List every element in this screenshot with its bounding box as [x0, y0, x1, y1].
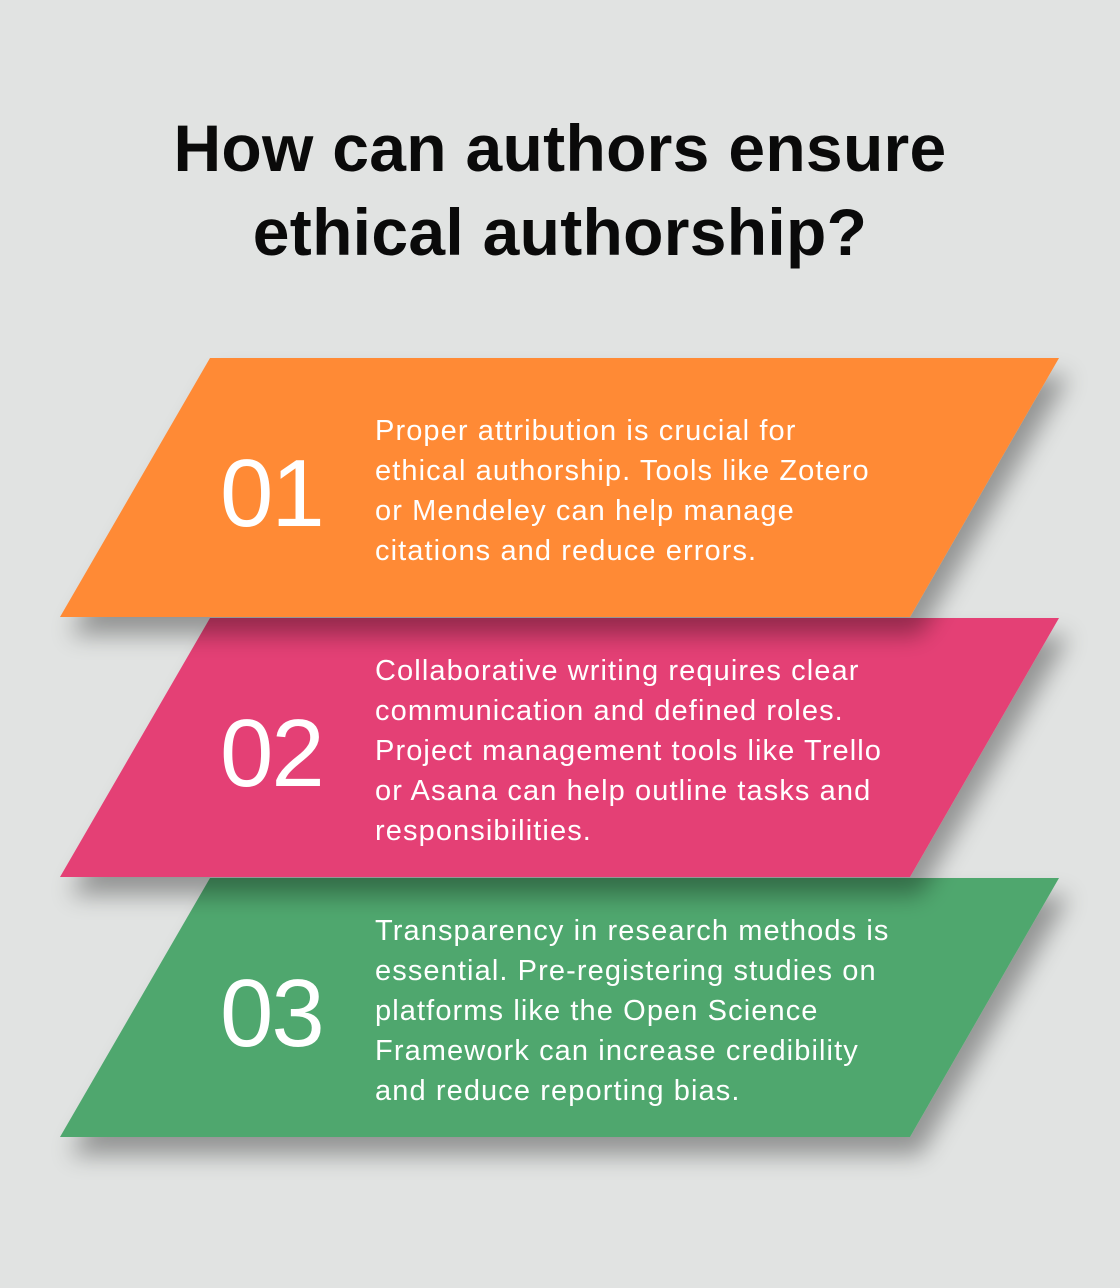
step 02: [220, 655, 882, 847]
title: How can authors ensure: [173, 111, 947, 185]
text 03: Framework can increase credibility: [375, 1035, 859, 1067]
text 02: Collaborative writing requires clear: [375, 655, 859, 687]
title: [173, 111, 947, 269]
band 1: orange: [60, 358, 1059, 617]
text 03: [375, 915, 890, 1107]
step 01: [220, 415, 870, 567]
step 03: [220, 915, 890, 1107]
text 02: [375, 655, 882, 847]
text 02: or Asana can help outline tasks and: [375, 775, 871, 807]
text 01: or Mendeley can help manage: [375, 495, 795, 527]
text 01: Proper attribution is crucial for: [375, 415, 797, 447]
text 03: Transparency in research methods is: [375, 915, 890, 947]
text 02: communication and defined roles.: [375, 695, 844, 727]
text 03: essential. Pre-registering studies on: [375, 955, 877, 987]
text 01: citations and reduce errors.: [375, 535, 757, 567]
number 02: 02: [220, 700, 323, 807]
number 01: 01: [220, 440, 323, 547]
text 01: [375, 415, 870, 567]
band 2: pink: [60, 618, 1059, 877]
number 03: 03: [220, 960, 323, 1067]
text 01: ethical authorship. Tools like Zotero: [375, 455, 870, 487]
text 02: Project management tools like Trello: [375, 735, 882, 767]
title: ethical authorship?: [253, 195, 867, 269]
text 02: responsibilities.: [375, 815, 592, 847]
text 03: platforms like the Open Science: [375, 995, 819, 1027]
text 03: and reduce reporting bias.: [375, 1075, 741, 1107]
band 3: green: [60, 878, 1059, 1137]
